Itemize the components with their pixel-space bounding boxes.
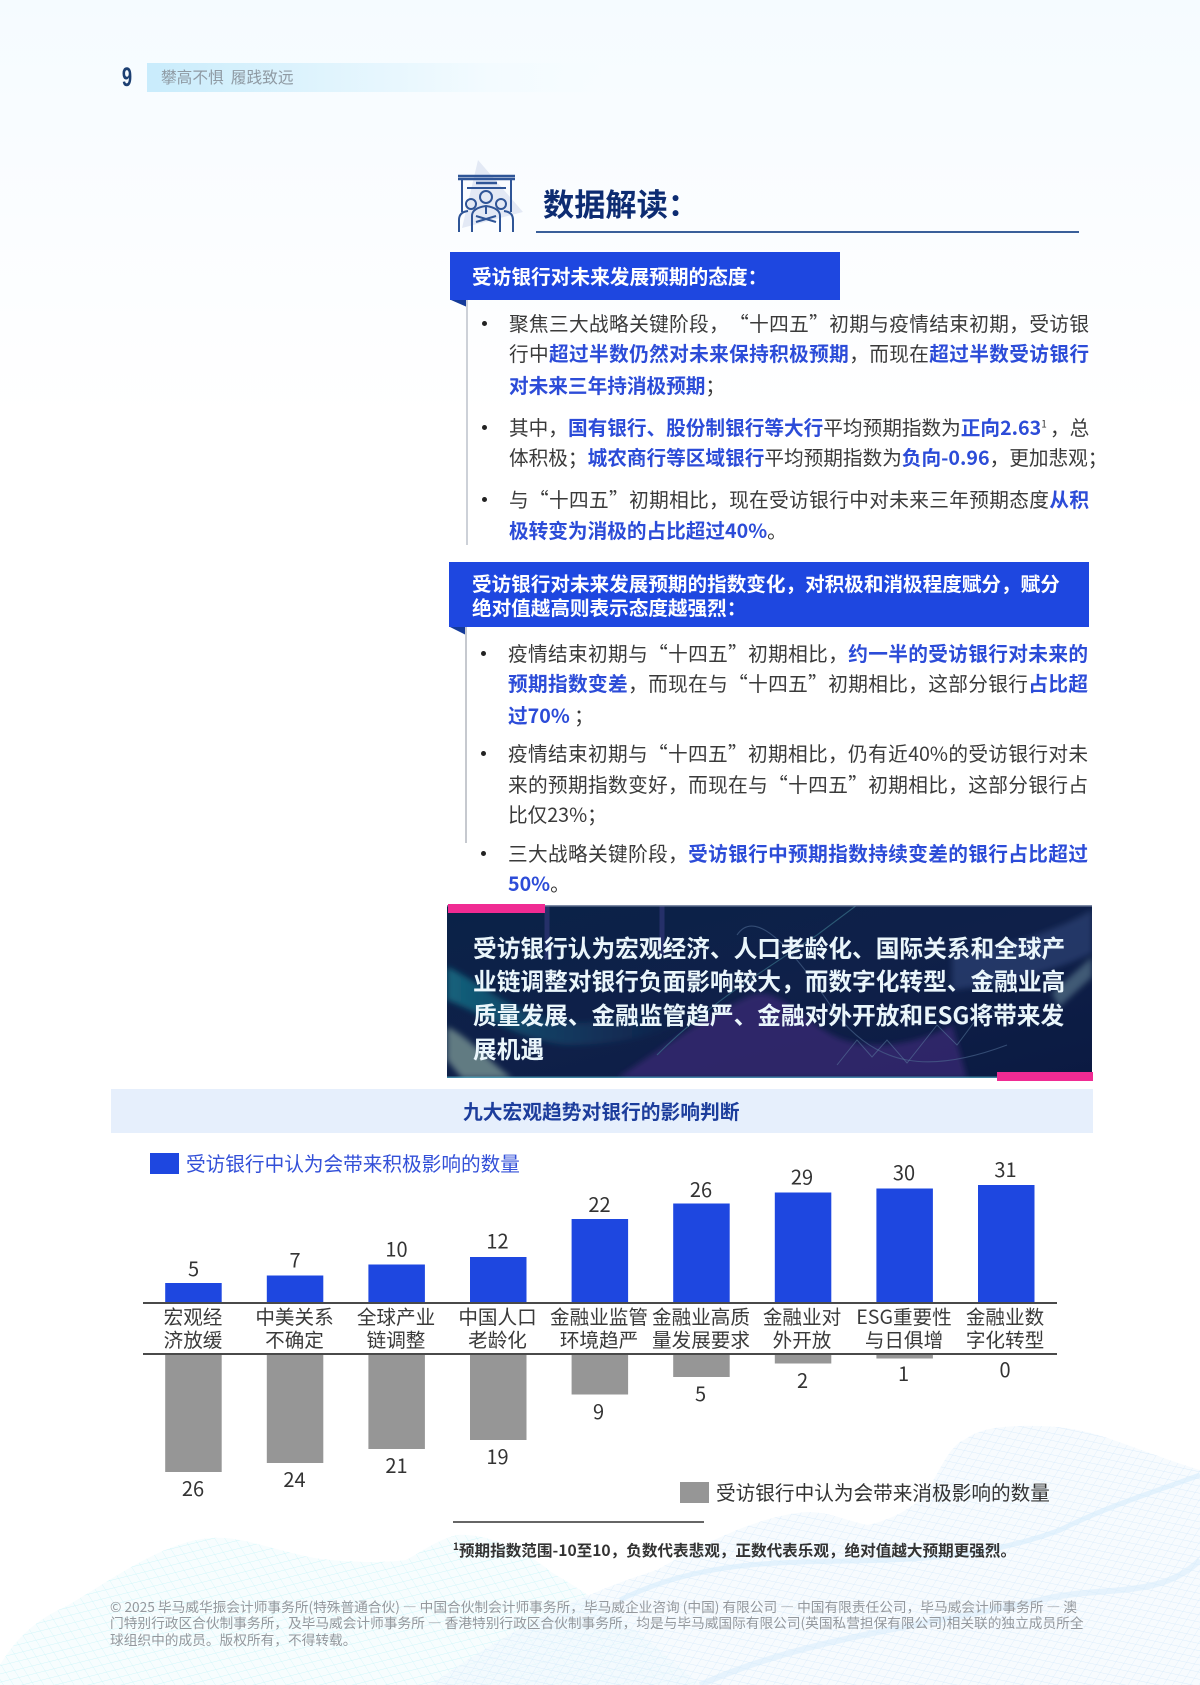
bullet 1: 聚焦三大战略关键阶段，“十四五”初期与疫情结束初期，受访银	[509, 308, 1089, 337]
bullet 3: 50%。	[508, 868, 570, 897]
negative values: 0	[999, 1354, 1011, 1383]
negative values: 2	[797, 1365, 808, 1394]
heading: index change: 受访银行对未来发展预期的指数变化，对积极和消极程度赋分，赋分	[472, 568, 1060, 597]
heading: attitude: 受访银行对未来发展预期的态度：	[472, 261, 767, 290]
positive values: 26	[690, 1174, 712, 1203]
callout text: 展机遇	[473, 1031, 544, 1065]
copyright notice	[110, 1596, 1084, 1649]
category labels: 老龄化	[468, 1324, 527, 1353]
running header text: 攀高不惧 履践致远	[161, 65, 294, 88]
bullet 2: 其中，国有银行、股份制银行等大行平均预期指数为正向2.631	[509, 412, 1047, 441]
category labels: 外开放	[773, 1324, 832, 1353]
copyright notice: © 2025 毕马威华振会计师事务所(特殊普通合伙) — 中国合伙制会计师事务所，毕马威企业咨询 (中国) 有限公司 — 中国有限责任公司，毕马威会计师事务所 — 澳	[110, 1596, 1077, 1616]
chart title panel	[111, 1089, 1093, 1133]
heading: index change	[449, 562, 1089, 627]
text block: index bullets	[481, 638, 1088, 897]
bullet 3: 三大战略关键阶段，受访银行中预期指数持续变差的银行占比超过	[508, 838, 1088, 867]
bullet 1: 疫情结束初期与“十四五”初期相比，约一半的受访银行对未来的	[508, 638, 1088, 667]
positive values: 7	[289, 1244, 301, 1274]
heading tab fold	[450, 627, 466, 635]
positive bars	[165, 1185, 1034, 1303]
positive values: 10	[385, 1234, 408, 1262]
bullet 2	[482, 412, 1107, 471]
bullet 3	[482, 484, 1089, 544]
icon: presenters at a board	[458, 160, 523, 232]
category labels: 环境趋严	[560, 1324, 638, 1353]
category labels: 不确定	[265, 1324, 324, 1353]
category labels: 金融业数	[966, 1301, 1045, 1330]
callout background art	[447, 905, 1092, 1078]
heading tab fold	[451, 300, 467, 307]
heading: attitude	[450, 252, 840, 300]
bullet 1: 行中超过半数仍然对未来保持积极预期，而现在超过半数受访银行	[509, 338, 1089, 367]
category labels: 量发展要求	[652, 1324, 750, 1353]
negative values	[182, 1354, 1011, 1502]
callout text: 业链调整对银行负面影响较大，而数字化转型、金融业高	[473, 963, 1065, 997]
bullet 2	[481, 738, 1088, 828]
copyright notice: 门特别行政区合伙制事务所，及毕马威会计师事务所 — 香港特别行政区合伙制事务所，均是与毕马威国际有限公司(英国私营担保有限公司)相关联的独立成员所全	[110, 1612, 1084, 1632]
category labels: ESG重要性	[856, 1301, 952, 1330]
negative values: 5	[695, 1378, 706, 1407]
bullet 2: 来的预期指数变好，而现在与“十四五”初期相比，这部分银行占	[508, 769, 1088, 798]
category labels: 链调整	[367, 1324, 425, 1353]
bullet 3: 与“十四五”初期相比，现在受访银行中对未来三年预期态度从积	[509, 484, 1089, 513]
bullet 1: 对未来三年持消极预期；	[509, 370, 725, 399]
bullet 3: 极转变为消极的占比超过40%。	[509, 515, 787, 544]
bullet 2: 体积极；城农商行等区域银行平均预期指数为负向-0.96，更加悲观；	[509, 442, 1107, 471]
footnote: 1预期指数范围-10至10，负数代表悲观，正数代表乐观，绝对值越大预期更强烈。	[453, 1538, 1016, 1561]
positive values	[188, 1154, 1017, 1282]
bullet 1: 过70% ；	[508, 700, 594, 729]
bullet 2: 比仅23%；	[508, 799, 607, 828]
callout text: 质量发展、金融监管趋严、金融对外开放和ESG将带来发	[473, 997, 1064, 1031]
positive values: 12	[486, 1226, 509, 1254]
legend: positive: 受访银行中认为会带来积极影响的数量	[186, 1148, 520, 1177]
pink accent bottom	[997, 1072, 1093, 1081]
category labels: 中国人口	[458, 1301, 537, 1330]
page number: 9	[122, 62, 132, 92]
title underline	[536, 231, 1079, 233]
running header band	[147, 63, 602, 92]
category labels: 金融业监管	[550, 1301, 648, 1330]
negative values: 19	[486, 1441, 509, 1470]
bullet 1	[481, 638, 1088, 729]
negative values: 24	[283, 1464, 306, 1493]
bullet 1: 预期指数变差，而现在与“十四五”初期相比，这部分银行占比超	[508, 668, 1088, 697]
pink accent top	[448, 904, 545, 913]
category labels: 与日俱增	[865, 1324, 943, 1353]
positive values: 30	[893, 1157, 915, 1186]
category labels: 全球产业	[357, 1301, 435, 1330]
category labels: 字化转型	[966, 1324, 1044, 1353]
axis lines	[143, 1302, 1057, 1355]
positive values: 29	[791, 1162, 813, 1190]
legend: negative: 受访银行中认为会带来消极影响的数量	[716, 1477, 1050, 1506]
negative values: 9	[593, 1396, 604, 1425]
category labels: 金融业高质	[652, 1301, 750, 1330]
bullet 2: ，总	[1050, 412, 1089, 441]
section title: 数据解读：	[543, 180, 699, 225]
positive values: 22	[588, 1189, 611, 1218]
category labels: 金融业对	[763, 1301, 841, 1330]
panel rule	[465, 627, 467, 843]
positive values: 5	[188, 1253, 199, 1282]
category labels	[164, 1301, 1045, 1353]
footnote rule	[453, 1521, 704, 1523]
negative bars	[165, 1354, 933, 1472]
panel rule	[466, 300, 468, 545]
category labels: 济放缓	[164, 1324, 223, 1353]
bullet 3	[481, 838, 1088, 897]
callout text: 受访银行认为宏观经济、人口老龄化、国际关系和全球产	[473, 930, 1065, 964]
bullet 2: 疫情结束初期与“十四五”初期相比，仍有近40%的受访银行对未	[508, 738, 1088, 767]
text block: attitude bullets	[482, 308, 1107, 544]
callout: dark finance panel	[447, 905, 1092, 1078]
copyright notice: 球组织中的成员。版权所有，不得转载。	[110, 1629, 356, 1649]
negative values: 1	[898, 1358, 909, 1387]
negative values: 26	[182, 1473, 204, 1502]
category labels: 中美关系	[255, 1301, 334, 1330]
category labels: 宏观经	[164, 1301, 222, 1330]
chart title: 九大宏观趋势对银行的影响判断	[463, 1096, 740, 1125]
callout text	[473, 930, 1065, 1065]
positive values: 31	[994, 1154, 1017, 1183]
bullet 1	[482, 308, 1089, 399]
negative values: 21	[385, 1450, 408, 1479]
heading: index change: 绝对值越高则表示态度越强烈：	[472, 592, 746, 621]
